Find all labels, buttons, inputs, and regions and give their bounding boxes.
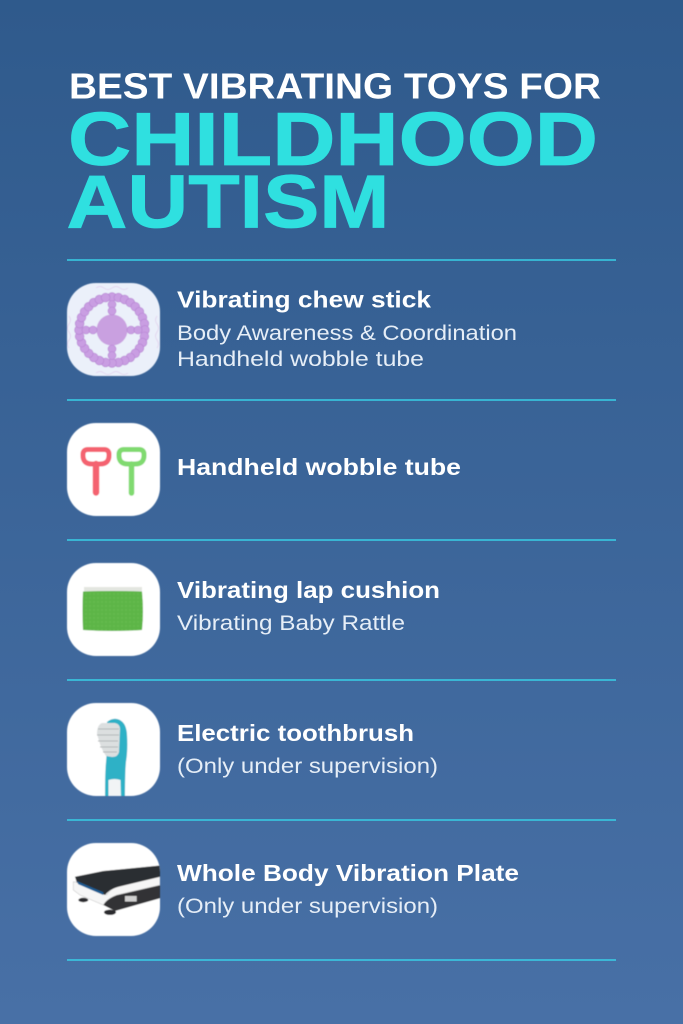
text: only under supervision: (Only under supervision) [177,754,438,778]
item 2: handheld wobble tube [67,423,461,516]
text: only under supervision: (Only under supervision) [177,894,438,918]
title [66,66,601,244]
icon: vibration plate [67,843,160,936]
item 5: whole body vibration plate [67,843,519,936]
text: body awareness and coordination: Body Awareness & Coordination [177,321,517,345]
icon: toothbrush head [67,703,160,798]
heading: handheld wobble tube: Handheld wobble tube [177,454,461,480]
item 4: electric toothbrush [67,703,438,798]
icon: red and green wobble tubes [67,423,160,516]
icon: purple chew ring [67,283,160,376]
text: handheld wobble tube: Handheld wobble tube [177,347,424,371]
heading: electric toothbrush: Electric toothbrush [177,720,414,746]
title line: autism: AUTISM [66,160,390,244]
heading: vibrating chew stick: Vibrating chew stick [177,286,431,312]
text: vibrating baby rattle: Vibrating Baby Rattle [177,611,405,635]
title line: childhood: CHILDHOOD [68,97,598,181]
heading: vibrating lap cushion: Vibrating lap cushion [177,577,440,603]
item 3: vibrating lap cushion [67,563,440,656]
item 1: vibrating chew stick [67,283,517,376]
title line: best vibrating toys for: BEST VIBRATING TOYS FOR [69,66,601,107]
icon: green cushion [67,563,160,656]
heading: whole body vibration plate: Whole Body Vibration Plate [177,860,519,886]
